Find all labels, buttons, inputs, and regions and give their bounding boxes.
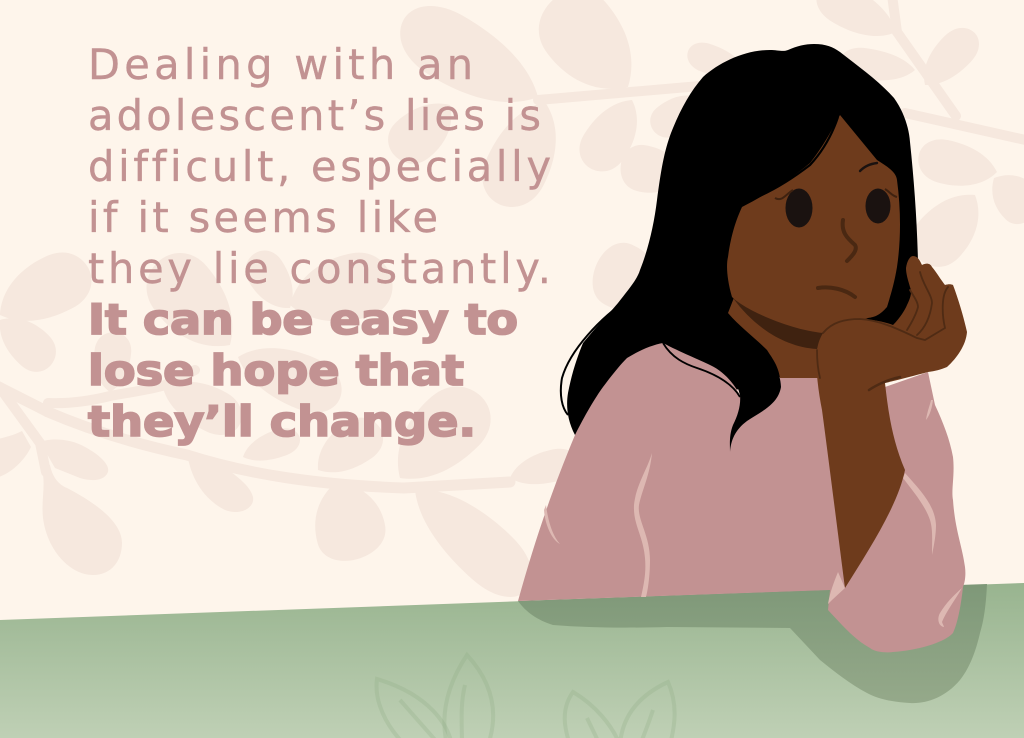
- text block: they lie constantly.: [88, 244, 551, 293]
- nose: [843, 220, 856, 261]
- text block: [88, 40, 551, 446]
- text block: if it seems like: [88, 193, 438, 242]
- table leaves: [377, 655, 675, 738]
- neck shadow: [733, 298, 830, 349]
- text block: they’ll change.: [88, 397, 476, 446]
- hair front lock: [720, 330, 781, 452]
- shirt strand line: [663, 343, 740, 397]
- person: [518, 44, 967, 652]
- finger and arm lines: [817, 272, 948, 390]
- hair back: [567, 44, 918, 435]
- text block: adolescent’s lies is: [88, 91, 541, 140]
- shirt folds: [544, 400, 962, 627]
- text block: Dealing with an: [88, 40, 473, 89]
- mouth: [818, 287, 855, 297]
- table: [0, 583, 1024, 738]
- arm and hand: [816, 256, 967, 588]
- hair line on forehead: [747, 117, 838, 201]
- eyes: [786, 188, 890, 228]
- text block: It can be easy to: [88, 295, 518, 344]
- text block: lose hope that: [88, 346, 464, 395]
- eyebrow: [860, 163, 877, 171]
- stray hair strand: [561, 298, 630, 415]
- shirt: [518, 343, 965, 652]
- text block: difficult, especially: [88, 142, 551, 191]
- table shadow: [518, 584, 987, 703]
- eyelashes: [775, 189, 897, 199]
- neck: [728, 295, 825, 378]
- face: [727, 115, 900, 333]
